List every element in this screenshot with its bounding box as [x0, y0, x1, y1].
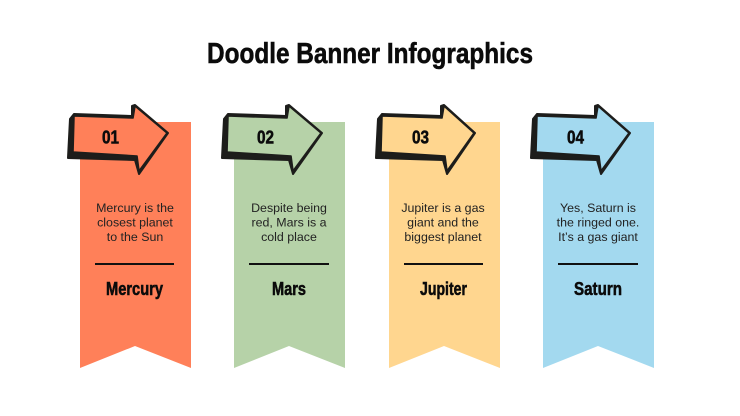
description: Mercury: closest planet [97, 216, 173, 230]
ribbon: Mars [234, 122, 345, 368]
description: Mars: cold place [261, 230, 317, 244]
description: Mercury: Mercury is the [96, 201, 174, 215]
arrow: 01 [68, 105, 168, 174]
description: Mercury: to the Sun [107, 230, 163, 244]
name: Mars: Mars [272, 279, 306, 299]
arrow: 03 [376, 105, 475, 174]
arrow: 04: 04 [567, 128, 584, 148]
description: Saturn: It’s a gas giant [558, 230, 638, 244]
ribbon: Saturn [543, 122, 654, 368]
description: Jupiter: giant and the [407, 216, 479, 230]
arrow: 04 [531, 105, 630, 174]
arrow: 01: 01 [102, 128, 119, 148]
description: Jupiter: biggest planet [404, 230, 482, 244]
panel: Mars [222, 105, 345, 368]
description: Mars: red, Mars is a [251, 216, 327, 230]
arrow: 02: 02 [257, 128, 274, 148]
name: Jupiter: Jupiter [420, 279, 467, 299]
arrow: 03: 03 [412, 128, 429, 148]
description: Mars: Despite being [251, 201, 327, 215]
ribbon: Mercury [80, 122, 191, 368]
name: Mercury: Mercury [106, 279, 163, 299]
name: Saturn: Saturn [574, 279, 622, 299]
ribbon: Jupiter [389, 122, 500, 368]
description: Saturn: the ringed one. [557, 216, 639, 230]
arrow: 02 [222, 105, 322, 174]
title: Doodle Banner Infographics [207, 38, 533, 70]
description: Saturn: Yes, Saturn is [560, 201, 636, 215]
panel: Mercury [68, 105, 191, 368]
panel: Saturn [531, 105, 654, 368]
panel: Jupiter [376, 105, 500, 368]
description: Jupiter: Jupiter is a gas [401, 201, 485, 215]
